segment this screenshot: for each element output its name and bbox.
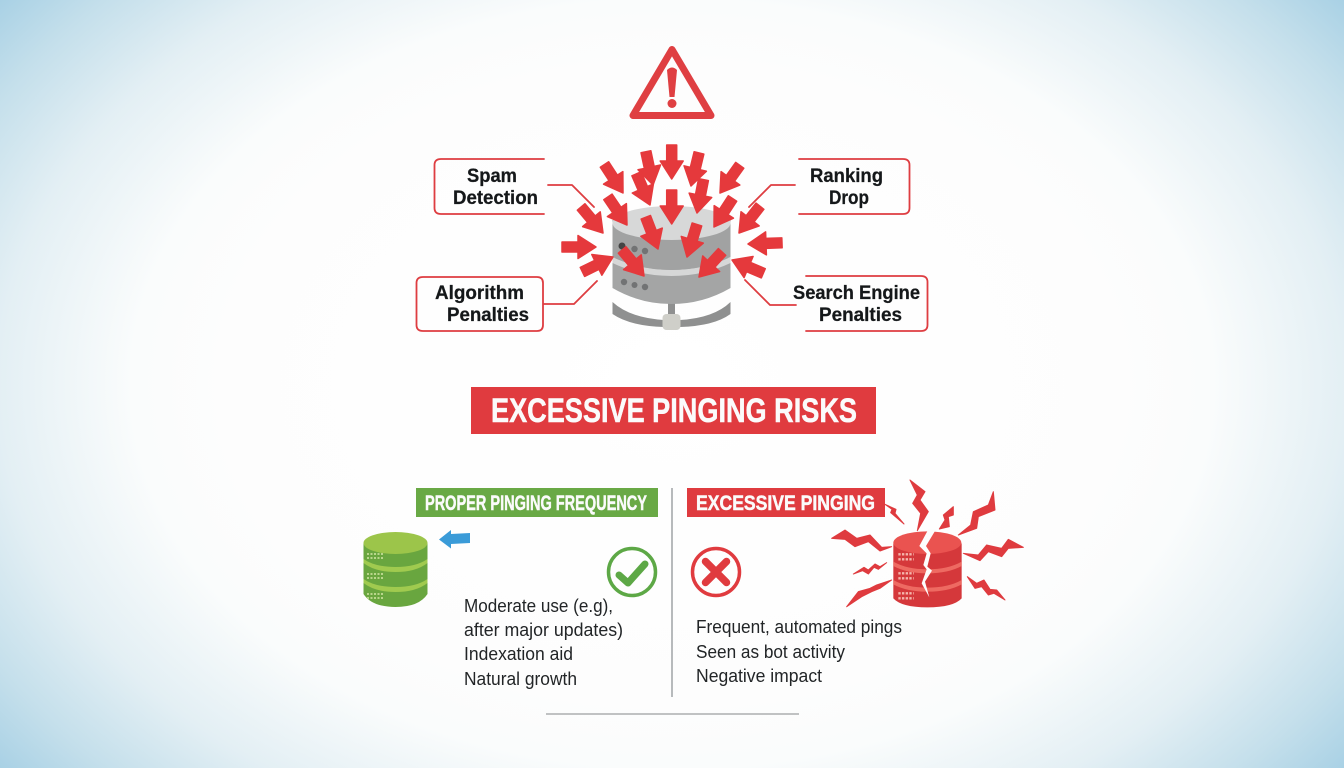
icon: green check mark <box>608 548 656 596</box>
callout: spam detection: Detection <box>453 188 538 209</box>
callout: search engine penalties: Penalties <box>819 305 902 326</box>
icon: red cross <box>692 548 740 596</box>
server stem <box>668 300 675 318</box>
icon: server under attack <box>612 206 730 330</box>
callout: algorithm penalties <box>416 277 597 331</box>
title banner <box>471 387 876 434</box>
callout: algorithm penalties: Penalties <box>447 305 529 326</box>
text: excessive pinging effects <box>696 617 902 686</box>
callout: spam detection: Spam <box>467 166 517 187</box>
heading: excessive pinging <box>687 488 885 517</box>
database bands <box>893 562 962 573</box>
icon: green database <box>364 532 428 607</box>
server light band <box>612 257 730 276</box>
text: proper pinging benefits: Indexation aid <box>464 644 573 664</box>
server lower tier <box>612 258 730 304</box>
icon: blue arrow <box>439 530 470 548</box>
callout: search engine penalties <box>745 276 928 331</box>
callout: ranking drop <box>749 159 910 214</box>
text: proper pinging benefits: Natural growth <box>464 669 577 689</box>
title banner: EXCESSIVE PINGING RISKS <box>491 392 857 430</box>
heading: proper pinging frequency <box>416 488 658 517</box>
icon: warning triangle <box>633 50 711 116</box>
database top <box>893 531 961 554</box>
server connector <box>662 314 680 330</box>
server base ring <box>612 302 730 327</box>
database body <box>893 543 962 607</box>
heading: proper pinging frequency: PROPER PINGING FREQUENCY <box>425 492 647 515</box>
text: excessive pinging effects: Negative impact <box>696 666 822 686</box>
callout: ranking drop: Ranking <box>810 166 883 187</box>
server status lights <box>618 242 648 290</box>
icon: cracked red database <box>832 480 1023 607</box>
text: proper pinging benefits: Moderate use (e.g), <box>464 596 613 616</box>
server upper tier <box>612 220 730 270</box>
text: excessive pinging effects: Frequent, automated pings <box>696 617 902 637</box>
callout: spam detection <box>434 159 594 214</box>
text: excessive pinging effects: Seen as bot activity <box>696 642 845 662</box>
database vents <box>898 554 914 598</box>
arrows converging on server <box>562 145 782 285</box>
callout: ranking drop: Drop <box>829 188 869 209</box>
text: proper pinging benefits <box>464 596 623 689</box>
callout: search engine penalties: Search Engine <box>793 283 920 304</box>
text: proper pinging benefits: after major updates) <box>464 620 623 640</box>
crack <box>919 529 936 597</box>
lightning bolts <box>832 480 1023 607</box>
server top face <box>612 206 730 240</box>
callout: algorithm penalties: Algorithm <box>435 283 524 304</box>
heading: excessive pinging: EXCESSIVE PINGING <box>696 492 875 515</box>
